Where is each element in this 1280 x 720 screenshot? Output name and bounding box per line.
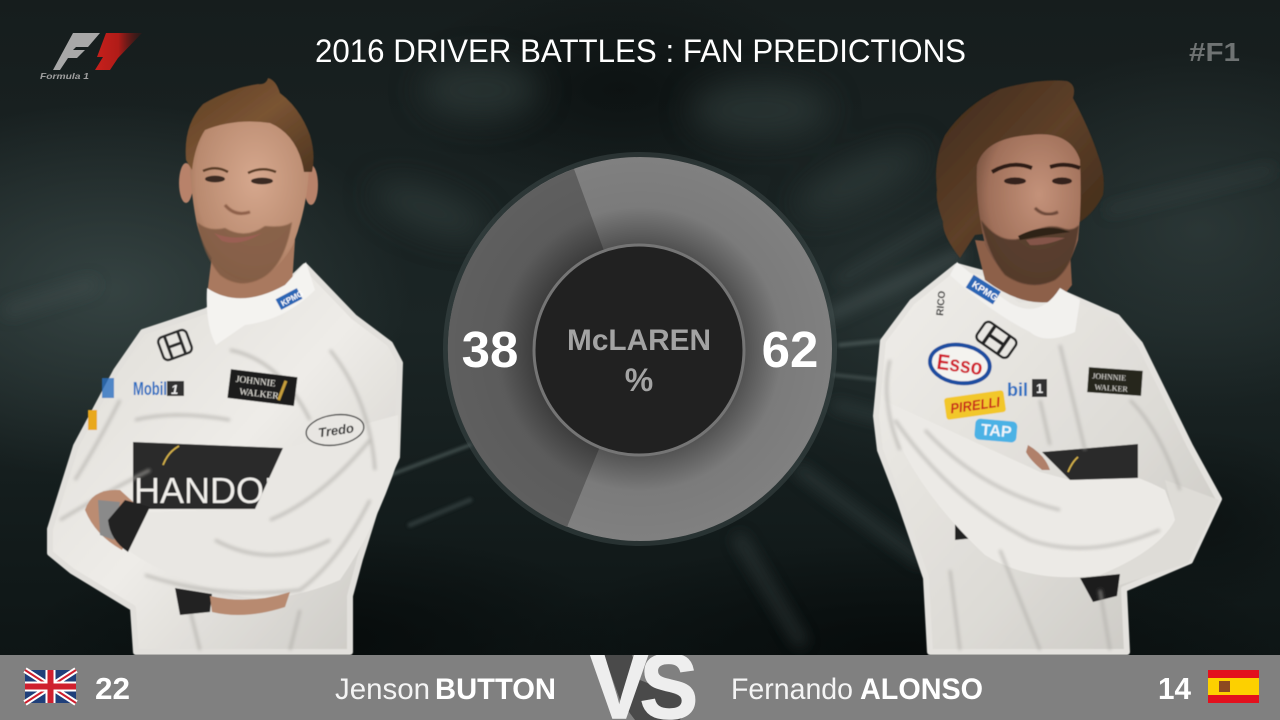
name: Jenson Button bbox=[335, 673, 556, 706]
value: Alonso: 62 bbox=[762, 321, 818, 378]
hair: Alonso bbox=[936, 80, 1104, 258]
logo: Johnnie Walker bbox=[1087, 367, 1143, 396]
logo: Johnnie Walker: WALKER bbox=[239, 387, 280, 402]
driver photo: Fernando Alonso bbox=[876, 80, 1219, 652]
collar: Alonso bbox=[950, 262, 1080, 338]
value: Button: 38 bbox=[462, 321, 518, 378]
flag: United Kingdom bbox=[25, 670, 76, 703]
neck: Alonso bbox=[975, 240, 1072, 302]
ears: Button bbox=[179, 163, 318, 205]
face: Alonso bbox=[977, 134, 1081, 285]
crossed arm: Alonso bbox=[883, 400, 1180, 577]
logo: Johnnie Walker: JOHNNIE bbox=[235, 375, 276, 390]
beard: Alonso bbox=[981, 220, 1079, 285]
nose and mouth: Button bbox=[214, 205, 262, 243]
flag: Spain bbox=[1208, 670, 1259, 703]
car number: Button: 22 bbox=[95, 671, 130, 706]
sponsor band: Button bbox=[132, 441, 284, 510]
logo: TAP: TAP bbox=[980, 422, 1013, 441]
segment: Alonso 62% bbox=[448, 157, 832, 541]
hub shadow bbox=[448, 157, 832, 541]
logo: Mobil 1: bil bbox=[1007, 380, 1028, 400]
eyes: Button bbox=[203, 168, 276, 184]
logo: Esso: Esso bbox=[935, 349, 984, 380]
collar: Button bbox=[207, 262, 315, 345]
logo: Johnnie Walker: WALKER bbox=[1094, 383, 1129, 394]
neck: Button bbox=[207, 240, 295, 303]
donut chart bbox=[446, 154, 834, 544]
suit folds: Alonso bbox=[887, 345, 1180, 650]
logo: Pirelli bbox=[944, 390, 1006, 420]
label: percent: % bbox=[625, 362, 653, 398]
logo: Pirelli: PIRELLI bbox=[949, 393, 1002, 416]
logo: Mobil 1 bbox=[1007, 379, 1047, 400]
segment: Button 38% bbox=[448, 169, 640, 527]
fingers: Alonso bbox=[1026, 445, 1050, 470]
suit: Button bbox=[50, 266, 400, 652]
beard: Button bbox=[197, 222, 292, 283]
bottom bar bbox=[0, 655, 1280, 720]
nose and mustache: Alonso bbox=[1018, 208, 1070, 245]
logo: Honda bbox=[975, 320, 1018, 360]
logo: Mobil 1: 1 bbox=[1036, 381, 1043, 396]
sponsor band: Button: CHANDON bbox=[108, 470, 290, 511]
logo: Johnnie Walker: JOHNNIE bbox=[1092, 371, 1126, 383]
logo: Esso bbox=[928, 341, 992, 387]
lower hand and cuff: Button bbox=[175, 588, 290, 615]
logo: Alfredo: Tredo bbox=[317, 420, 355, 440]
logo: Johnnie Walker bbox=[227, 369, 297, 406]
hashtag: #F1 bbox=[1189, 37, 1240, 67]
logo: KPMG bbox=[966, 275, 1001, 305]
donut outer halo bbox=[446, 154, 834, 544]
hand and watch: Button bbox=[85, 490, 150, 552]
hair: Button bbox=[186, 78, 314, 172]
logo: KPMG: KPMG bbox=[279, 289, 305, 308]
suit folds: Button bbox=[60, 350, 375, 650]
name: Jenson Button: BUTTON bbox=[435, 673, 556, 706]
eyes: Alonso bbox=[992, 165, 1080, 185]
crossed arm: Button bbox=[122, 415, 398, 598]
driver photo: Jenson Button bbox=[50, 78, 400, 652]
face: Button bbox=[189, 112, 309, 281]
sleeve cuff: Alonso bbox=[1080, 574, 1120, 602]
suit: Alonso bbox=[876, 266, 1219, 652]
logo: Mobil 1: Mobil bbox=[133, 379, 167, 399]
name: Fernando Alonso bbox=[731, 673, 983, 706]
forearm: Alonso bbox=[1100, 480, 1219, 585]
name: Jenson Button: Jenson bbox=[335, 673, 430, 706]
logo: sleeve sponsors bbox=[88, 378, 114, 430]
name: Fernando Alonso: ALONSO bbox=[860, 673, 983, 706]
logo: TAP bbox=[974, 418, 1018, 443]
label: McLaren: McLAREN bbox=[567, 324, 711, 357]
logo: KPMG: KPMG bbox=[970, 279, 1000, 304]
sponsor band: Alonso bbox=[955, 444, 1138, 540]
logo: Honda bbox=[157, 329, 193, 361]
logo: Alfredo bbox=[304, 411, 366, 449]
title: 2016 DRIVER BATTLES : FAN PREDICTIONS bbox=[315, 33, 966, 69]
logo: Ricoh: RICO bbox=[935, 290, 948, 316]
name: Fernando Alonso: Fernando bbox=[731, 673, 853, 706]
hub bbox=[534, 245, 744, 455]
F1 logo bbox=[40, 33, 142, 81]
logo: Mobil 1: 1 bbox=[171, 382, 178, 397]
F1 logo: Formula 1 bbox=[40, 71, 89, 81]
car number: Alonso: 14 bbox=[1158, 671, 1192, 706]
